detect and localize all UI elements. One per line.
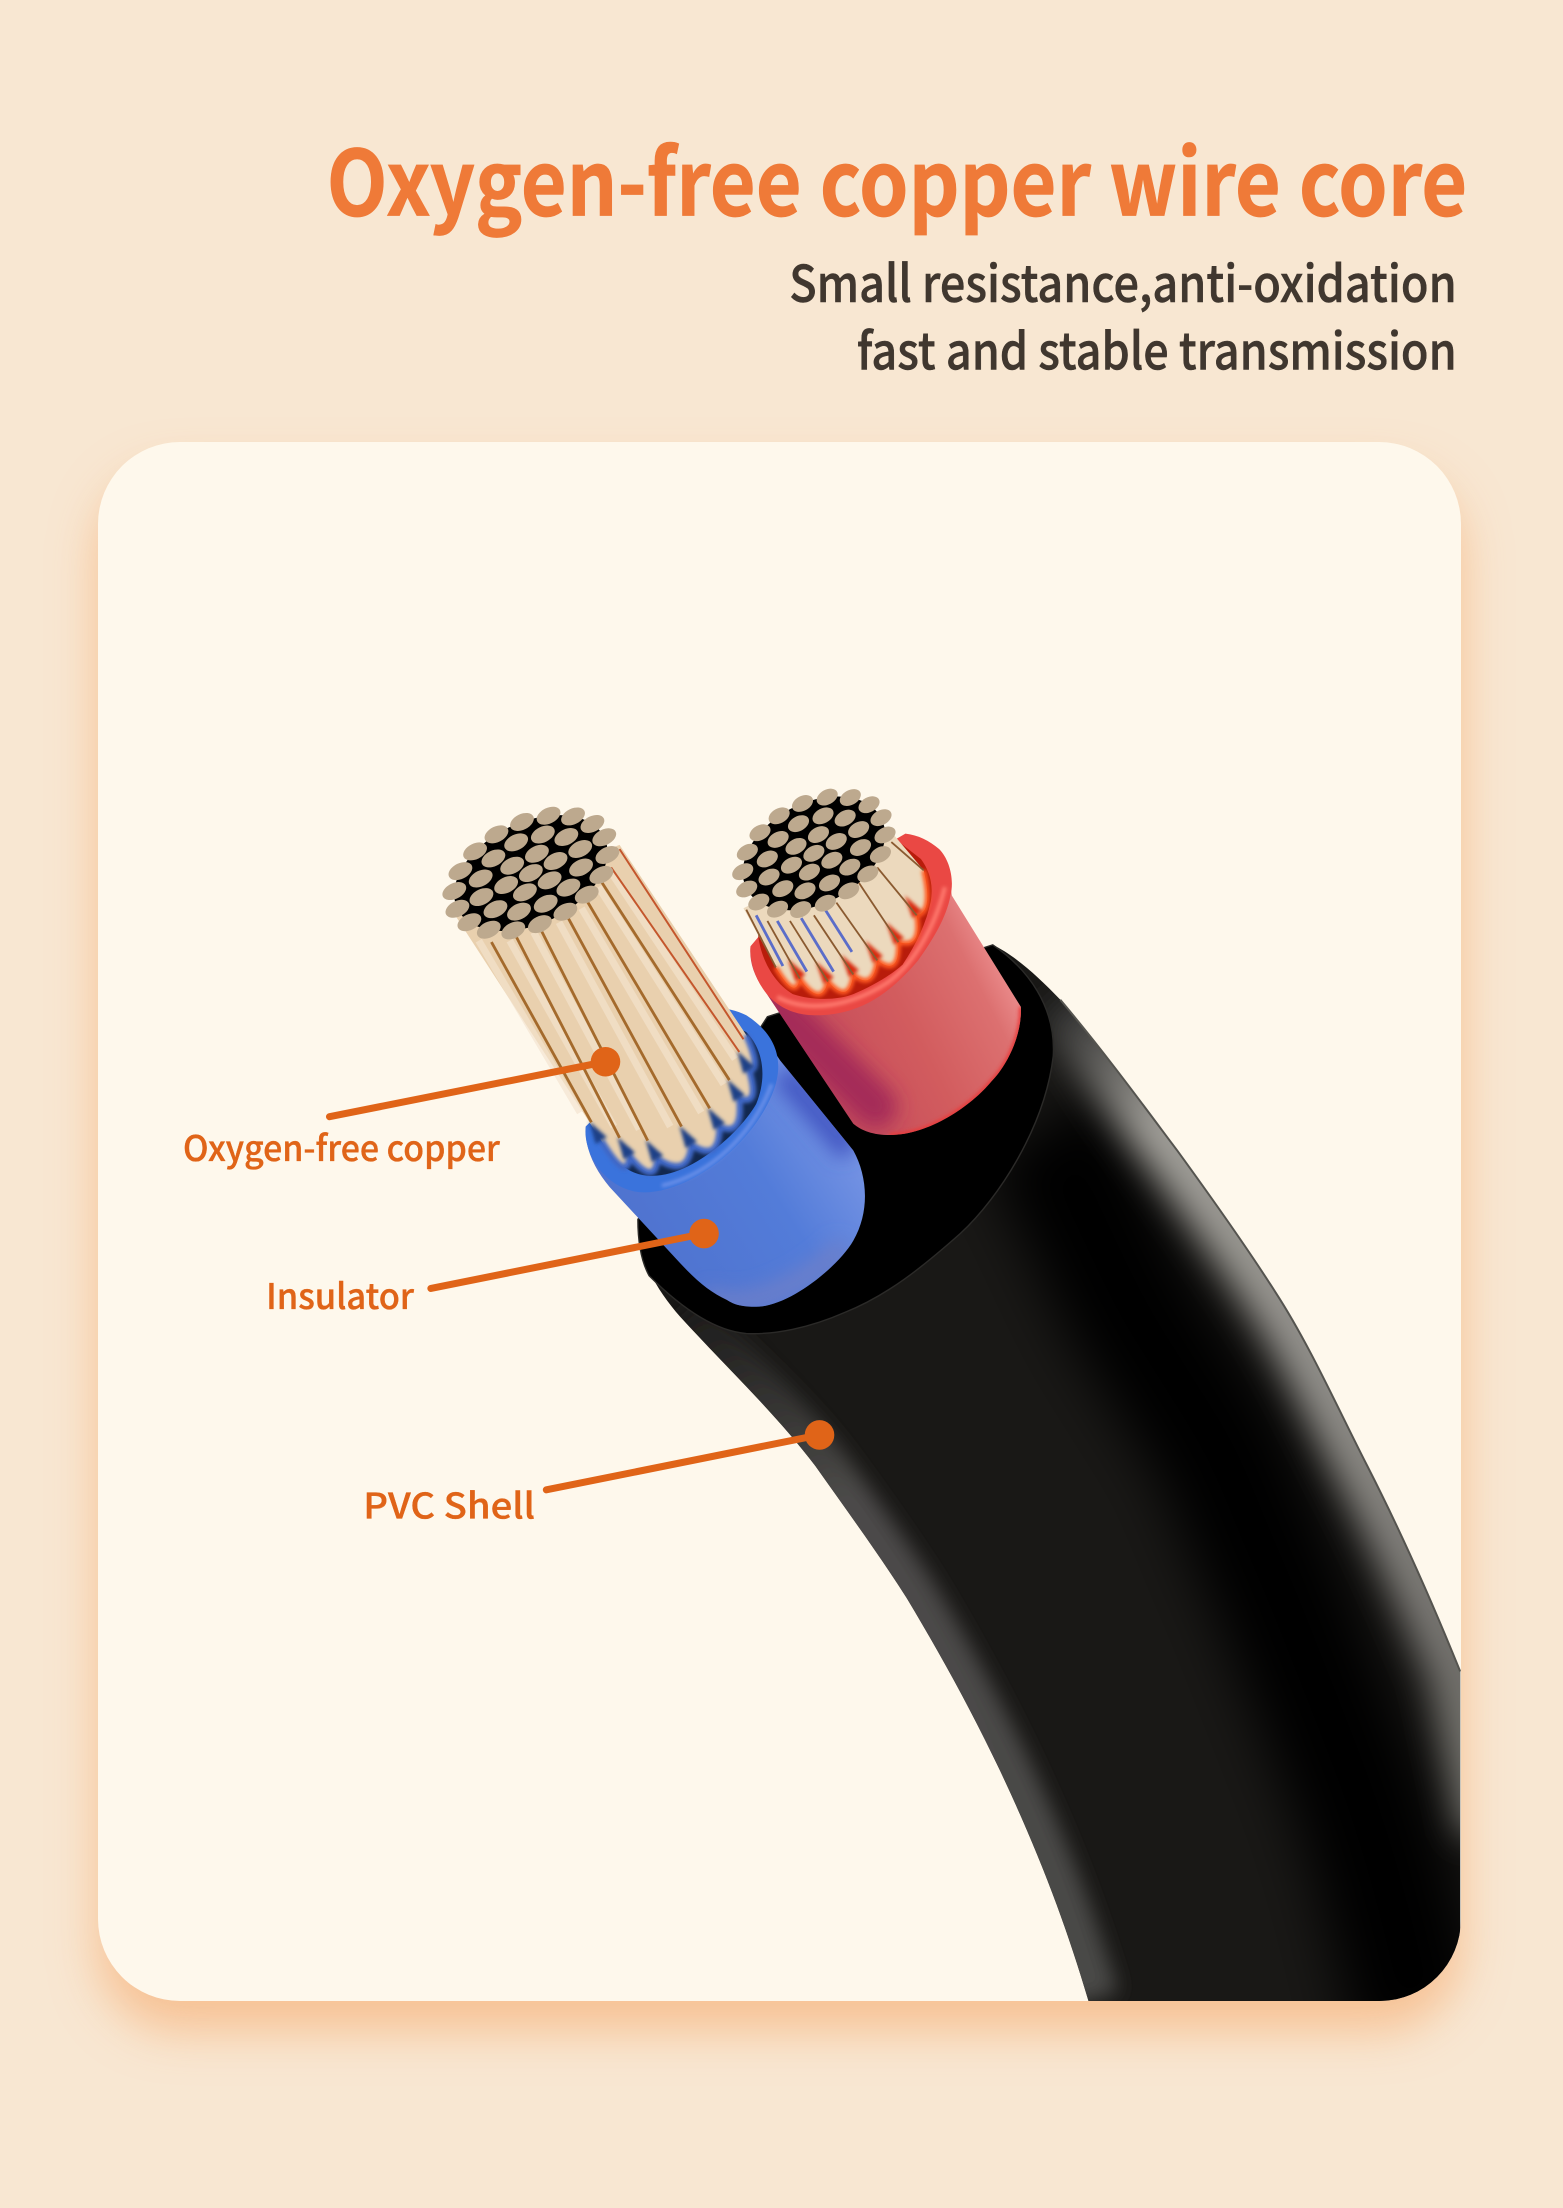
blue insulator ring: [585, 1008, 778, 1192]
blue core end face: [442, 806, 620, 940]
red insulator ring: [750, 834, 952, 1015]
callout: PVC shell: PVC Shell: [363, 1479, 535, 1530]
callout: insulator: Insulator: [266, 1269, 415, 1320]
cable illustration: [435, 773, 1493, 2042]
red insulator hole: [758, 839, 932, 999]
panel: card background: [98, 442, 1461, 2001]
copper strands in blue core: [451, 845, 755, 1172]
red insulator body: [750, 890, 1021, 1135]
blue insulated core: [435, 792, 865, 1307]
callout: oxygen-free copper: [183, 1047, 620, 1172]
subtitle: fast and stable transmission: [857, 311, 1457, 385]
red core end face: [732, 788, 896, 918]
subtitle: Small resistance,anti-oxidation: [789, 243, 1457, 317]
callout: insulator: [266, 1219, 719, 1320]
black PVC jacket: [638, 945, 1493, 2042]
callout: PVC shell: [363, 1420, 834, 1530]
red insulated core: [723, 773, 1021, 1135]
copper strands in red core: [743, 834, 927, 994]
callout: oxygen-free copper: Oxygen-free copper: [183, 1121, 500, 1172]
ring highlight: [777, 887, 945, 1006]
ring highlight: [662, 1084, 772, 1186]
blue insulator body: [586, 1056, 865, 1307]
blue insulator hole: [625, 1030, 762, 1176]
jacket cut face: [638, 945, 1053, 1334]
subtitle: [789, 243, 1457, 385]
